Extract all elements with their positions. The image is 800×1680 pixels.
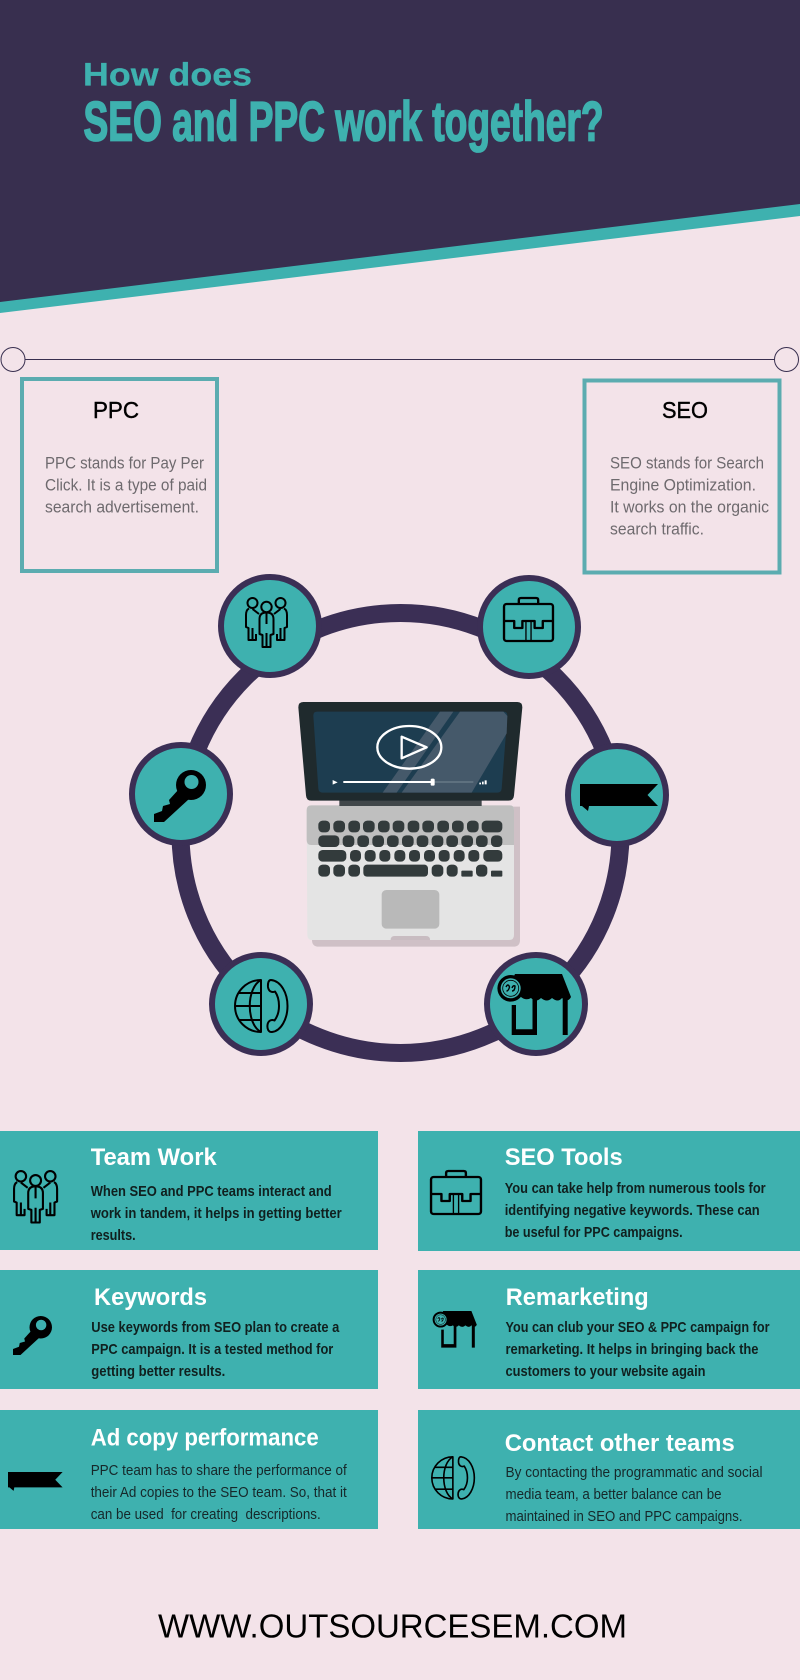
panel: SEO: It works on the organic	[610, 498, 769, 516]
panel: PPC: Click. It is a type of paid	[45, 476, 207, 494]
panel: Team Work: work in tandem, it helps in getting better	[90, 1205, 342, 1222]
panel: SEO: SEO stands for Search	[610, 454, 764, 472]
panel: Ad copy performance	[0, 1410, 378, 1529]
icon: shop circle	[487, 955, 585, 1053]
laptop illustration	[298, 702, 522, 947]
panel: Team Work	[0, 1131, 378, 1250]
panel: PPC: PPC	[93, 397, 139, 423]
panel: Remarketing: remarketing. It helps in bringing back the	[506, 1341, 758, 1358]
panel: Contact other teams: media team, a better balance can be	[506, 1486, 722, 1503]
panel: Ad copy performance: their Ad copies to the SEO team. So, that it	[91, 1484, 347, 1501]
footer url: WWW.OUTSOURCESEM.COM	[158, 1609, 627, 1646]
panel: Remarketing	[418, 1270, 800, 1389]
panel: SEO: search traffic.	[610, 520, 704, 538]
title: How does	[83, 56, 252, 92]
icon: briefcase circle	[480, 578, 578, 676]
icon: key circle	[132, 745, 230, 843]
panel: Ad copy performance: PPC team has to share the performance of	[91, 1462, 347, 1479]
panel: SEO Tools: SEO Tools	[505, 1144, 623, 1171]
icon: banner circle	[568, 746, 666, 844]
panel: Team Work: When SEO and PPC teams interact and	[91, 1183, 332, 1200]
icon: globe and phone circle	[212, 955, 310, 1053]
icon: team circle	[221, 577, 319, 675]
panel: Keywords: Keywords	[94, 1284, 207, 1311]
panel: SEO: SEO	[662, 397, 708, 423]
panel: Contact other teams	[418, 1410, 800, 1529]
panel: Keywords: PPC campaign. It is a tested method for	[91, 1341, 333, 1358]
panel: Keywords: getting better results.	[91, 1363, 225, 1380]
panel: Contact other teams: maintained in SEO and PPC campaigns.	[506, 1508, 742, 1525]
panel: PPC: PPC stands for Pay Per	[45, 454, 204, 472]
panel: Team Work: results.	[91, 1227, 136, 1244]
panel: SEO Tools: identifying negative keywords. These can	[505, 1202, 760, 1219]
panel: Keywords	[0, 1270, 378, 1389]
header teal stripe	[0, 0, 800, 313]
panel: SEO	[584, 380, 780, 572]
panel: Keywords: Use keywords from SEO plan to create a	[91, 1319, 340, 1336]
title	[83, 56, 604, 152]
panel: Remarketing: Remarketing	[506, 1284, 649, 1311]
panel: PPC: search advertisement.	[45, 498, 199, 516]
panel: Contact other teams: By contacting the programmatic and social	[506, 1464, 762, 1481]
panel: Team Work: Team Work	[91, 1144, 217, 1171]
connector line with end circles	[1, 348, 798, 372]
panel: SEO Tools: be useful for PPC campaigns.	[505, 1224, 683, 1241]
ring	[180, 613, 620, 1053]
panel: PPC	[22, 379, 217, 571]
panel: Contact other teams: Contact other teams	[505, 1430, 735, 1457]
header dark banner	[0, 0, 800, 302]
panel: Ad copy performance: Ad copy performance	[91, 1425, 319, 1452]
panel: SEO: Engine Optimization.	[610, 476, 756, 494]
panel: Ad copy performance: can be used for creating descriptions.	[91, 1506, 321, 1523]
panel: Remarketing: customers to your website again	[506, 1363, 706, 1380]
panel: SEO Tools	[418, 1131, 800, 1251]
